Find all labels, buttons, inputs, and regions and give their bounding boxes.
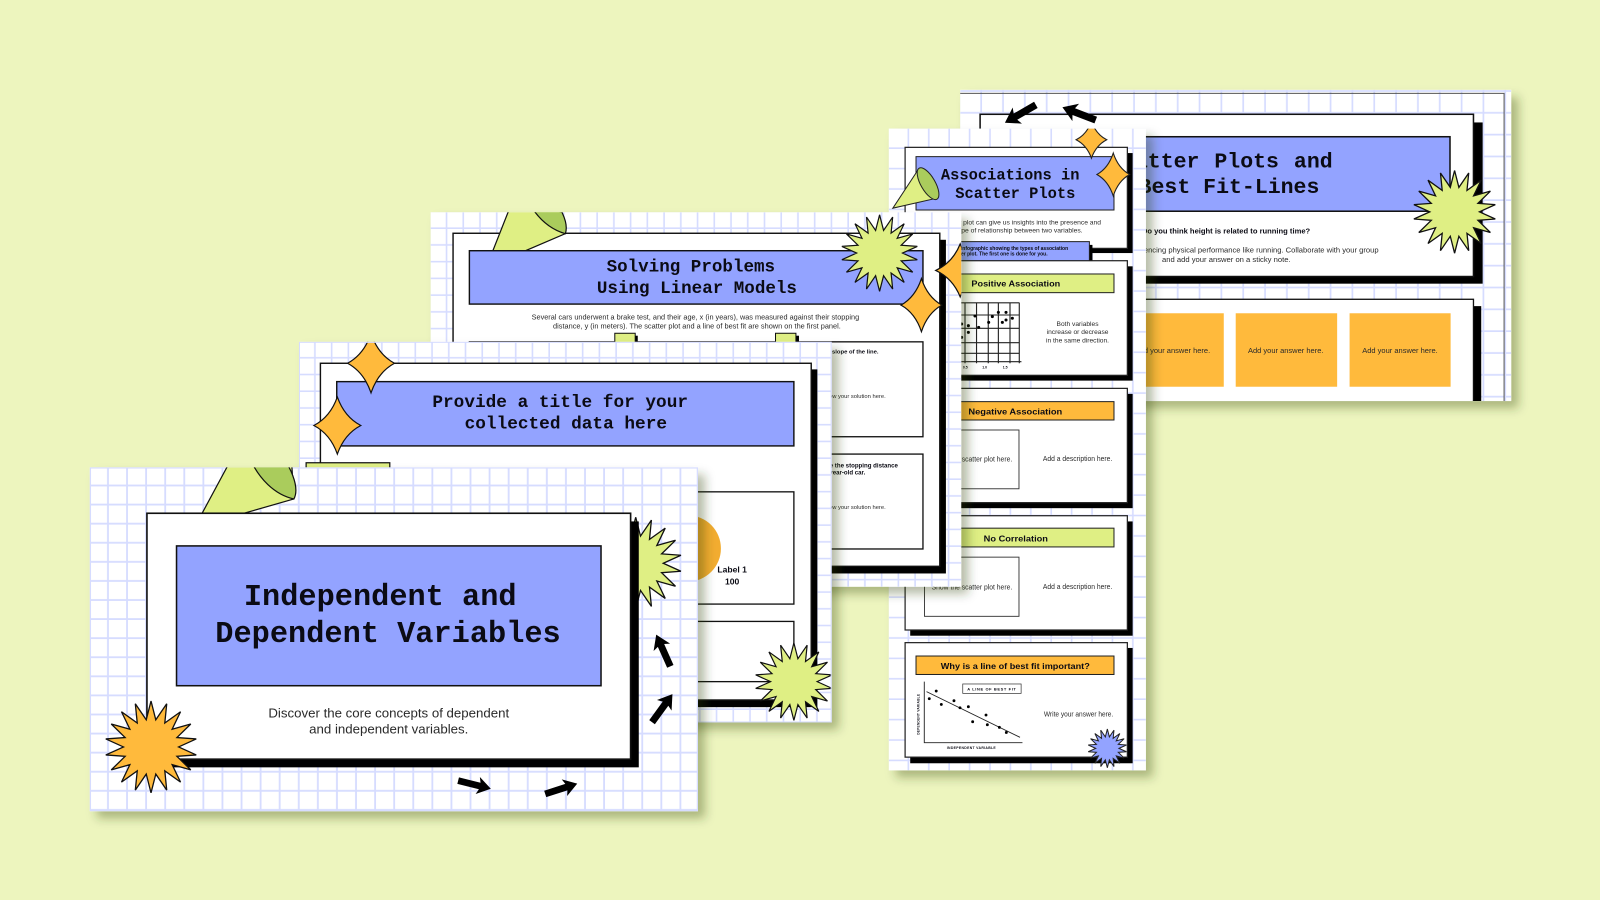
card: title: Associations in	[941, 167, 1079, 185]
heading: Best Fit-Lines	[1139, 176, 1319, 200]
icon: green starburst	[1414, 171, 1495, 253]
icon: sparkle top	[348, 334, 394, 393]
chart: line of best fit: DEPENDENT VARIABLE	[916, 693, 920, 735]
title: Dependent Variables	[215, 618, 561, 652]
card: no correlation	[905, 516, 1133, 636]
sticky note 2	[1236, 313, 1337, 387]
icon: sparkle right	[1097, 153, 1130, 196]
icon: sparkle top	[1076, 121, 1107, 158]
icon: arrow left-down	[1005, 102, 1038, 124]
panel: question 2	[832, 453, 924, 550]
icon: green starburst	[590, 517, 681, 609]
description: increase or decrease	[1047, 329, 1109, 336]
panel: question 1	[469, 333, 923, 437]
subtitle	[268, 705, 509, 737]
icon: cone	[492, 212, 567, 250]
panel: chart: 100	[725, 577, 740, 587]
icon: cone	[893, 165, 943, 208]
icon: arrow left-up	[1062, 104, 1097, 124]
card: negative association: Add a description here.	[1043, 456, 1112, 463]
instruction bar	[961, 241, 1092, 260]
panel: sticky notes: Add your answer here.	[1248, 347, 1323, 355]
heading: Scatter Plots and	[1109, 150, 1333, 174]
scatter plot grid: 0.5	[963, 365, 968, 369]
heading	[1146, 152, 1332, 193]
chart: line of best fit: INDEPENDENT VARIABLE	[947, 746, 996, 750]
panel: chart	[347, 492, 794, 604]
heading bar	[337, 382, 794, 446]
panel: question 1: Find the slope of the line.	[807, 350, 879, 356]
panel: question 1: Show your solution here.	[822, 394, 886, 400]
instruction text: and add your answer on a sticky note.	[1162, 255, 1291, 264]
icon: blue starburst	[1088, 729, 1126, 768]
arrow: right-down	[456, 772, 493, 797]
card: negative association: Show the scatter plot here.	[932, 457, 1012, 464]
icon: sparkle	[901, 279, 942, 332]
panel: sticky notes: Add your answer here.	[1362, 347, 1438, 355]
card: no correlation: Show the scatter plot here.	[932, 584, 1012, 591]
sticky note 1	[1146, 313, 1224, 387]
scatter plot grid: 1.0	[982, 365, 987, 369]
label tab	[306, 463, 390, 483]
panel: slide Associations in Scatter Plots	[889, 121, 1146, 770]
card: positive association: Positive Association	[971, 279, 1060, 289]
panel: slide Scatter Plots and Best Fit-Lines	[960, 90, 1512, 401]
panel: slide Independent and Dependent Variables	[90, 449, 698, 811]
problem statement: Several cars underwent a brake test, and their age, x (in years), was measured against their stopping	[532, 312, 859, 321]
question text: Do you think height is related to running time?	[1142, 226, 1310, 235]
heading: Solving Problems	[607, 257, 775, 277]
heading: collected data here	[465, 415, 667, 435]
heading bar	[1146, 136, 1451, 212]
card: title: type of relationship between two variables.	[956, 228, 1083, 235]
card: line of best fit: Write your answer here.	[1044, 711, 1113, 718]
panel: slide Solving Problems Using Linear Models	[431, 194, 985, 587]
title: Independent and	[244, 581, 517, 615]
arrow: up-left	[648, 631, 679, 670]
panel: sticky notes	[1146, 298, 1474, 401]
icon: sparkle left	[314, 397, 361, 454]
panel: chart: Label 1	[717, 564, 747, 574]
card: positive association	[961, 260, 1133, 381]
panel: question 2: of a 10-year-old car.	[808, 469, 866, 476]
icon: orange starburst	[106, 701, 196, 793]
card: line of best fit	[905, 643, 1133, 763]
heading bar	[469, 251, 923, 304]
card: line of best fit: Why is a line of best fit important?	[941, 661, 1090, 671]
icon: cone	[194, 449, 296, 529]
panel: question 2: Show your solution here.	[822, 505, 886, 511]
instruction text: Consider factors influencing physical performance like running. Collaborate with your group	[1073, 245, 1379, 254]
description: Add a brief description of your collected data here.	[468, 466, 648, 475]
icon: green starburst	[756, 643, 832, 720]
description	[1046, 322, 1108, 342]
instruction bar: in a scatter plot. The first one is done for you.	[939, 252, 1048, 258]
icon: green starburst	[842, 215, 917, 291]
title	[215, 581, 561, 652]
scatter plot grid: 1.5	[1003, 365, 1008, 369]
problem statement	[532, 314, 859, 330]
instruction bar: Create an infographic showing the types of association	[937, 246, 1068, 252]
heading: Using Linear Models	[597, 279, 797, 299]
sticky note 3	[1350, 313, 1451, 387]
card: negative association: Negative Association	[968, 406, 1062, 416]
card: negative association	[961, 388, 1133, 508]
arrow: right-up	[543, 775, 580, 802]
heading	[597, 257, 797, 299]
card: no correlation: No Correlation	[984, 533, 1048, 543]
panel: slide Provide a title	[299, 334, 832, 722]
icon: sparkle clipped	[934, 242, 962, 298]
heading bar	[177, 546, 601, 686]
chart: line of best fit	[916, 682, 1022, 750]
subtitle: and independent variables.	[309, 722, 468, 737]
scatter plot grid	[961, 302, 1022, 368]
arrow: up-right	[645, 689, 680, 727]
card: title: Scatter Plots	[955, 185, 1075, 203]
chart: line of best fit: A LINE OF BEST FIT	[967, 686, 1016, 691]
panel: question 2: Estimate the stopping distance	[808, 462, 899, 469]
panel: sticky notes: Add your answer here.	[1135, 347, 1210, 355]
title card	[147, 513, 631, 759]
heading	[434, 394, 687, 428]
description: Both variables	[1057, 321, 1099, 328]
card: title	[905, 147, 1133, 253]
heading: Provide a title for your	[432, 393, 688, 413]
card: title: A scatter plot can give us insights into the presence and	[935, 219, 1101, 226]
panel: lower box	[347, 621, 794, 682]
problem statement: distance, y (in meters). The scatter plot and a line of best fit are shown on the first panel.	[553, 322, 841, 331]
instruction text	[1146, 247, 1378, 264]
description: in the same direction.	[1046, 337, 1109, 344]
card: no correlation: Add a description here.	[1043, 584, 1112, 591]
subtitle: Discover the core concepts of dependent	[268, 705, 509, 720]
